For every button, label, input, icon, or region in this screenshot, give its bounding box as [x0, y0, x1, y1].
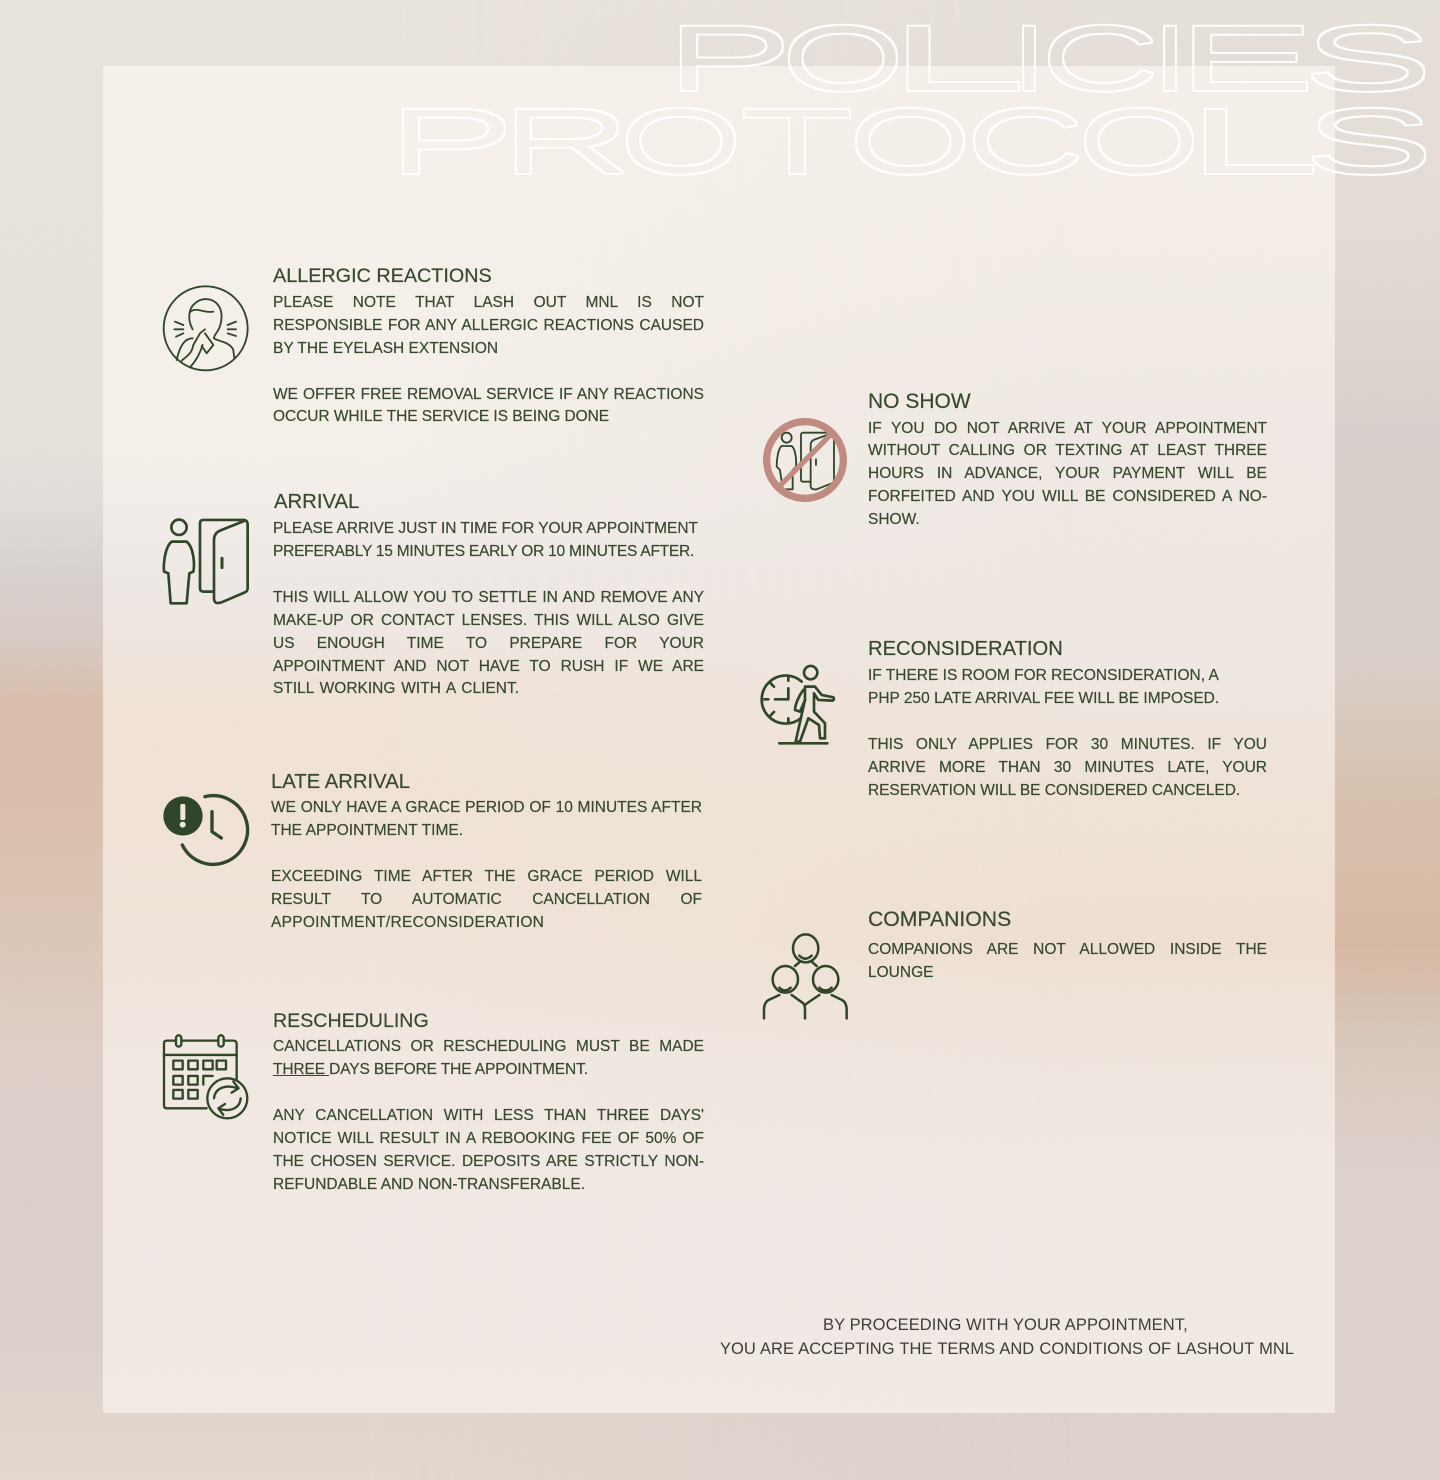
text: reconsideration: THIS ONLY APPLIES FOR 30 MINUTES. IF YOU: [868, 736, 1267, 752]
heading: late arrival: LATE ARRIVAL: [271, 771, 410, 793]
text: companions: COMPANIONS ARE NOT ALLOWED INSIDE THE: [868, 940, 1267, 958]
text: rescheduling: REFUNDABLE AND NON-TRANSFERABLE.: [273, 1176, 585, 1192]
text: arrival: US ENOUGH TIME TO PREPARE FOR YOUR: [273, 634, 704, 652]
title: S: [1303, 90, 1435, 190]
icon: three people: [762, 933, 848, 1020]
title: O: [847, 90, 973, 190]
title: [390, 10, 1435, 190]
icon: prohibited person and door: [763, 418, 847, 502]
title: O: [618, 90, 744, 190]
footer note: BY PROCEEDING WITH YOUR APPOINTMENT,: [823, 1316, 1188, 1334]
icon: clock and walking person: [760, 664, 836, 745]
text: arrival: PLEASE ARRIVE JUST IN TIME FOR YOUR APPOINTMENT: [273, 520, 698, 536]
footer note: YOU ARE ACCEPTING THE TERMS AND CONDITIONS OF LASHOUT MNL: [720, 1340, 1294, 1358]
text: companions: [868, 940, 1267, 980]
text: late arrival: RESULT TO AUTOMATIC CANCELLATION OF: [271, 890, 702, 908]
panel: no show: [763, 390, 1267, 528]
heading: reconsideration: RECONSIDERATION: [868, 638, 1063, 660]
icon: person and door: [162, 518, 249, 605]
text: companions: LOUNGE: [868, 964, 933, 980]
text: arrival: STILL WORKING WITH A CLIENT.: [273, 680, 519, 696]
text: rescheduling: [272, 1038, 704, 1192]
text: arrival: THIS WILL ALLOW YOU TO SETTLE IN AND REMOVE ANY: [273, 588, 704, 606]
text: rescheduling: NOTICE WILL RESULT IN A REBOOKING FEE OF 50% OF: [273, 1130, 704, 1146]
text: allergic reactions: [273, 294, 704, 424]
text: allergic reactions: BY THE EYELASH EXTENSION: [273, 340, 498, 356]
text: rescheduling: THE CHOSEN SERVICE. DEPOSITS ARE STRICTLY NON-: [273, 1152, 704, 1170]
text: no show: FORFEITED AND YOU WILL BE CONSIDERED A NO-: [868, 488, 1267, 504]
text: allergic reactions: RESPONSIBLE FOR ANY ALLERGIC REACTIONS CAUSED: [273, 316, 704, 334]
text: no show: IF YOU DO NOT ARRIVE AT YOUR APPOINTMENT: [868, 420, 1267, 436]
text: rescheduling: ANY CANCELLATION WITH LESS THAN THREE DAYS': [273, 1106, 704, 1124]
text: reconsideration: [868, 666, 1267, 798]
icon: person sneezing: [162, 285, 249, 372]
panel: allergic reactions: [162, 265, 704, 424]
text: rescheduling: CANCELLATIONS OR RESCHEDULING MUST BE MADE: [273, 1038, 704, 1054]
panel: main translucent card: [103, 66, 1335, 1413]
title: I: [1009, 10, 1049, 110]
text: allergic reactions: OCCUR WHILE THE SERVICE IS BEING DONE: [273, 408, 609, 424]
title: C: [965, 90, 1085, 190]
text: late arrival: EXCEEDING TIME AFTER THE GRACE PERIOD WILL: [271, 868, 702, 884]
panel: rescheduling: [162, 1010, 704, 1192]
title: P: [664, 10, 794, 110]
panel: arrival: [162, 491, 704, 696]
text: late arrival: [270, 798, 702, 930]
panel: reconsideration: [760, 638, 1267, 798]
text: reconsideration: PHP 250 LATE ARRIVAL FEE WILL BE IMPOSED.: [868, 690, 1219, 706]
text: arrival: [272, 520, 704, 696]
icon: calendar with refresh: [162, 1034, 248, 1120]
text: arrival: APPOINTMENT AND NOT HAVE TO RUSH IF WE ARE: [273, 658, 704, 674]
title: C: [1040, 10, 1160, 110]
text: late arrival: WE ONLY HAVE A GRACE PERIOD OF 10 MINUTES AFTER: [271, 798, 702, 816]
footer note: [720, 1316, 1294, 1358]
title: T: [739, 90, 855, 190]
icon: clock with alert: [163, 794, 250, 866]
text: arrival: PREFERABLY 15 MINUTES EARLY OR 10 MINUTES AFTER.: [273, 542, 694, 560]
heading: allergic reactions: ALLERGIC REACTIONS: [273, 265, 492, 287]
text: no show: HOURS IN ADVANCE, YOUR PAYMENT WILL BE: [868, 464, 1267, 482]
heading: no show: NO SHOW: [868, 390, 971, 413]
text: rescheduling: THREE DAYS BEFORE THE APPOINTMENT.: [273, 1060, 588, 1078]
text: no show: [868, 420, 1267, 528]
text: reconsideration: ARRIVE MORE THAN 30 MINUTES LATE, YOUR: [868, 758, 1267, 776]
text: reconsideration: IF THERE IS ROOM FOR RECONSIDERATION, A: [868, 666, 1219, 684]
heading: companions: COMPANIONS: [868, 908, 1011, 931]
background: left colour wash: [0, 254, 476, 1480]
text: late arrival: THE APPOINTMENT TIME.: [271, 822, 463, 838]
text: no show: WITHOUT CALLING OR TEXTING AT LEAST THREE: [868, 442, 1267, 458]
text: late arrival: APPOINTMENT/RECONSIDERATION: [271, 914, 544, 930]
heading: arrival: ARRIVAL: [274, 491, 359, 513]
title: L: [1183, 90, 1323, 190]
text: reconsideration: RESERVATION WILL BE CONSIDERED CANCELED.: [868, 782, 1240, 798]
text: no show: SHOW.: [868, 510, 920, 528]
panel: late arrival: [163, 771, 702, 930]
text: allergic reactions: WE OFFER FREE REMOVAL SERVICE IF ANY REACTIONS: [273, 386, 704, 402]
title: R: [500, 90, 632, 190]
panel: companions: [762, 908, 1267, 1020]
text: arrival: MAKE-UP OR CONTACT LENSES. THIS WILL ALSO GIVE: [273, 612, 704, 628]
title: I: [1150, 10, 1190, 110]
title: O: [1076, 90, 1202, 190]
heading: rescheduling: RESCHEDULING: [273, 1010, 429, 1032]
text: allergic reactions: PLEASE NOTE THAT LASH OUT MNL IS NOT: [273, 294, 704, 310]
